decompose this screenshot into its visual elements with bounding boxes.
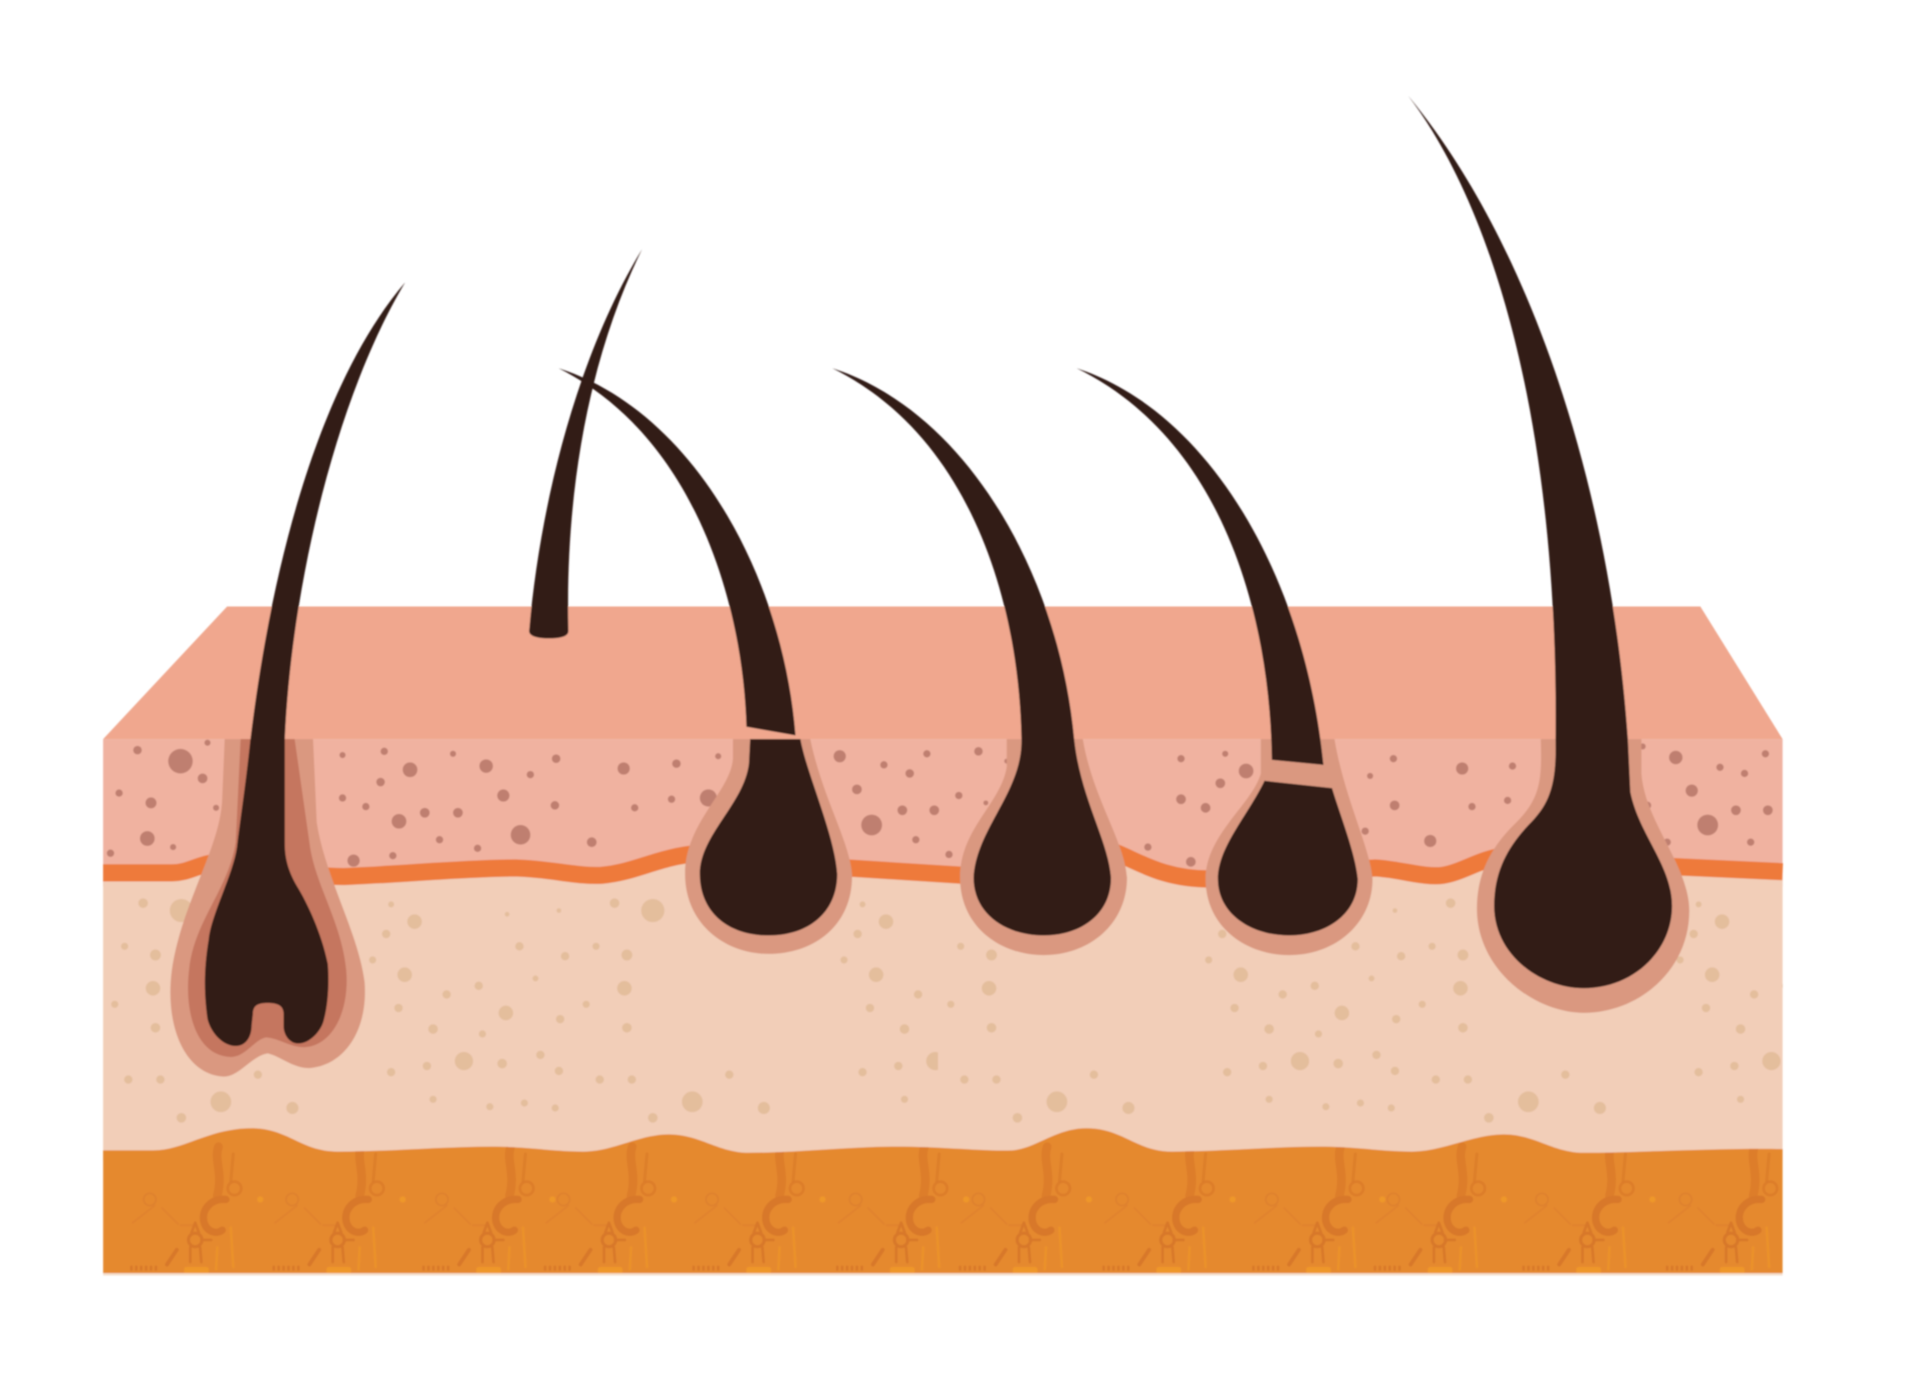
fat cell texture [130,1147,1799,1274]
short broken hair [529,249,642,638]
hypodermis layer [103,851,1783,1160]
skin cross-section illustration [102,97,1784,1276]
skin top surface [103,606,1783,739]
follicle 2 with cut hair [559,368,852,954]
fat layer [103,1128,1799,1276]
dermis layer [103,739,1783,886]
split hair shaft [1077,368,1323,765]
hypodermis dots [112,899,1876,1122]
follicle 5 with long hair [1408,96,1689,1013]
cut hair shaft [559,368,796,735]
softened artwork group [103,96,1876,1276]
follicle 1 with hair [170,282,405,1077]
orange boundary line [103,851,1783,879]
dermis dots [107,740,1773,867]
follicle 3 with healthy hair [832,368,1127,955]
follicle 4 with split hair [1077,368,1373,955]
